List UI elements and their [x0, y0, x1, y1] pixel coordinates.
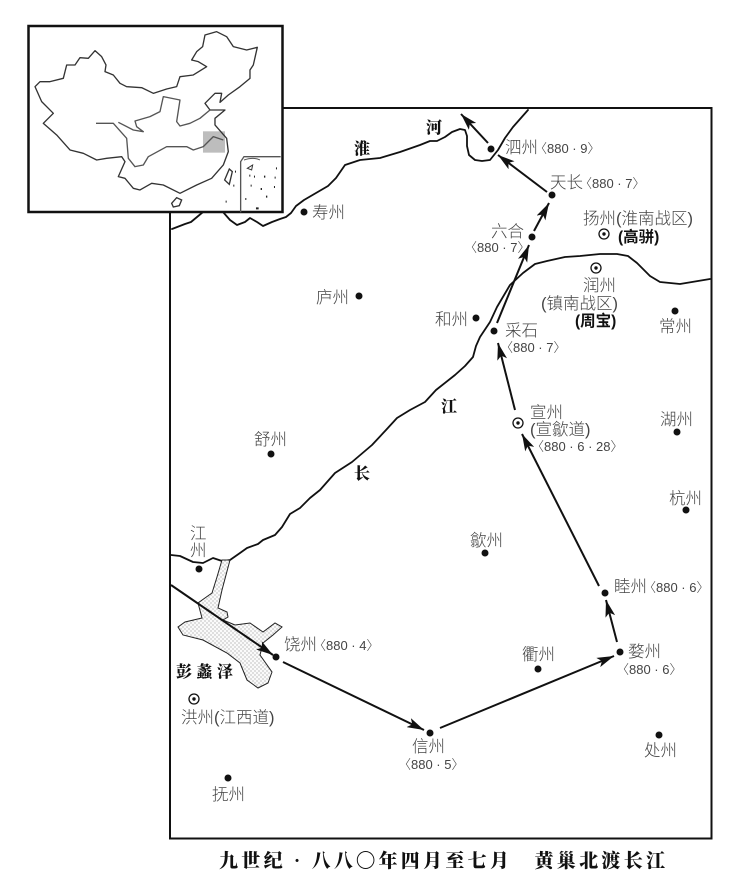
place labels: 庐州: [316, 288, 349, 307]
place labels: 〈880 · 7〉: [500, 340, 566, 355]
place labels: 〈880 · 5〉: [398, 757, 464, 772]
place labels: 洪州(江西道): [181, 708, 274, 727]
place labels: (周宝): [575, 311, 616, 330]
place labels: 〈880 · 6〉: [616, 662, 682, 677]
river and lake labels: [176, 119, 457, 681]
place labels: 采石: [505, 321, 538, 340]
title: 九世纪 · 八八〇年四月至七月 黄巢北渡长江: [219, 849, 665, 872]
place labels: 常州: [659, 317, 692, 336]
place labels: 舒州: [254, 430, 287, 449]
place labels: 江: [190, 524, 206, 543]
place labels: 润州: [583, 276, 616, 295]
place labels: 天长〈880 · 7〉: [550, 173, 645, 192]
place labels: [181, 138, 709, 804]
place labels: 〈880 · 7〉: [464, 240, 530, 255]
river and lake labels: 江: [441, 398, 457, 416]
river: Huai: [172, 110, 528, 229]
panel: main map frame: [170, 108, 712, 838]
lake: Poyang: [178, 560, 282, 688]
place labels: 信州: [412, 737, 445, 756]
place labels: 睦州〈880 · 6〉: [614, 577, 709, 596]
place labels: (高骈): [618, 227, 659, 246]
place labels: 泗州〈880 · 9〉: [505, 138, 600, 157]
route: Huang Chao march: [171, 114, 617, 730]
place labels: 处州: [644, 741, 677, 760]
river and lake labels: 彭蠡泽: [176, 662, 233, 681]
place labels: 寿州: [312, 203, 345, 222]
place labels: 和州: [435, 310, 468, 329]
place labels: 衢州: [522, 645, 555, 664]
place labels: 扬州(淮南战区): [583, 209, 693, 228]
river and lake labels: 淮: [354, 139, 370, 158]
place labels: 饶州〈880 · 4〉: [284, 635, 379, 654]
inset map: China locator: [28, 26, 282, 212]
place labels: 抚州: [212, 785, 245, 804]
South China Sea inset: [226, 157, 281, 212]
river and lake labels: 河: [426, 119, 442, 137]
Taiwan: [225, 169, 232, 184]
place labels: 杭州: [669, 489, 702, 508]
Yellow River: [118, 97, 210, 132]
place labels: 州: [190, 542, 206, 560]
place labels: 宣州: [530, 403, 563, 422]
Hainan: [172, 198, 182, 207]
circuit capital markers: [189, 229, 609, 704]
Yangtze River: [96, 123, 223, 167]
place labels: 湖州: [660, 410, 693, 429]
place labels: 〈880 · 6 · 28〉: [531, 439, 624, 454]
place labels: (宣歙道): [530, 420, 590, 439]
China outline: [35, 32, 257, 193]
city markers: [196, 146, 690, 782]
place labels: (镇南战区): [541, 294, 618, 313]
place labels: 婺州: [628, 642, 661, 661]
place labels: 六合: [491, 222, 524, 241]
river: Yangtze: [171, 254, 710, 563]
place labels: 歙州: [470, 531, 503, 550]
river and lake labels: 长: [354, 464, 370, 483]
locator highlight: [203, 131, 225, 153]
